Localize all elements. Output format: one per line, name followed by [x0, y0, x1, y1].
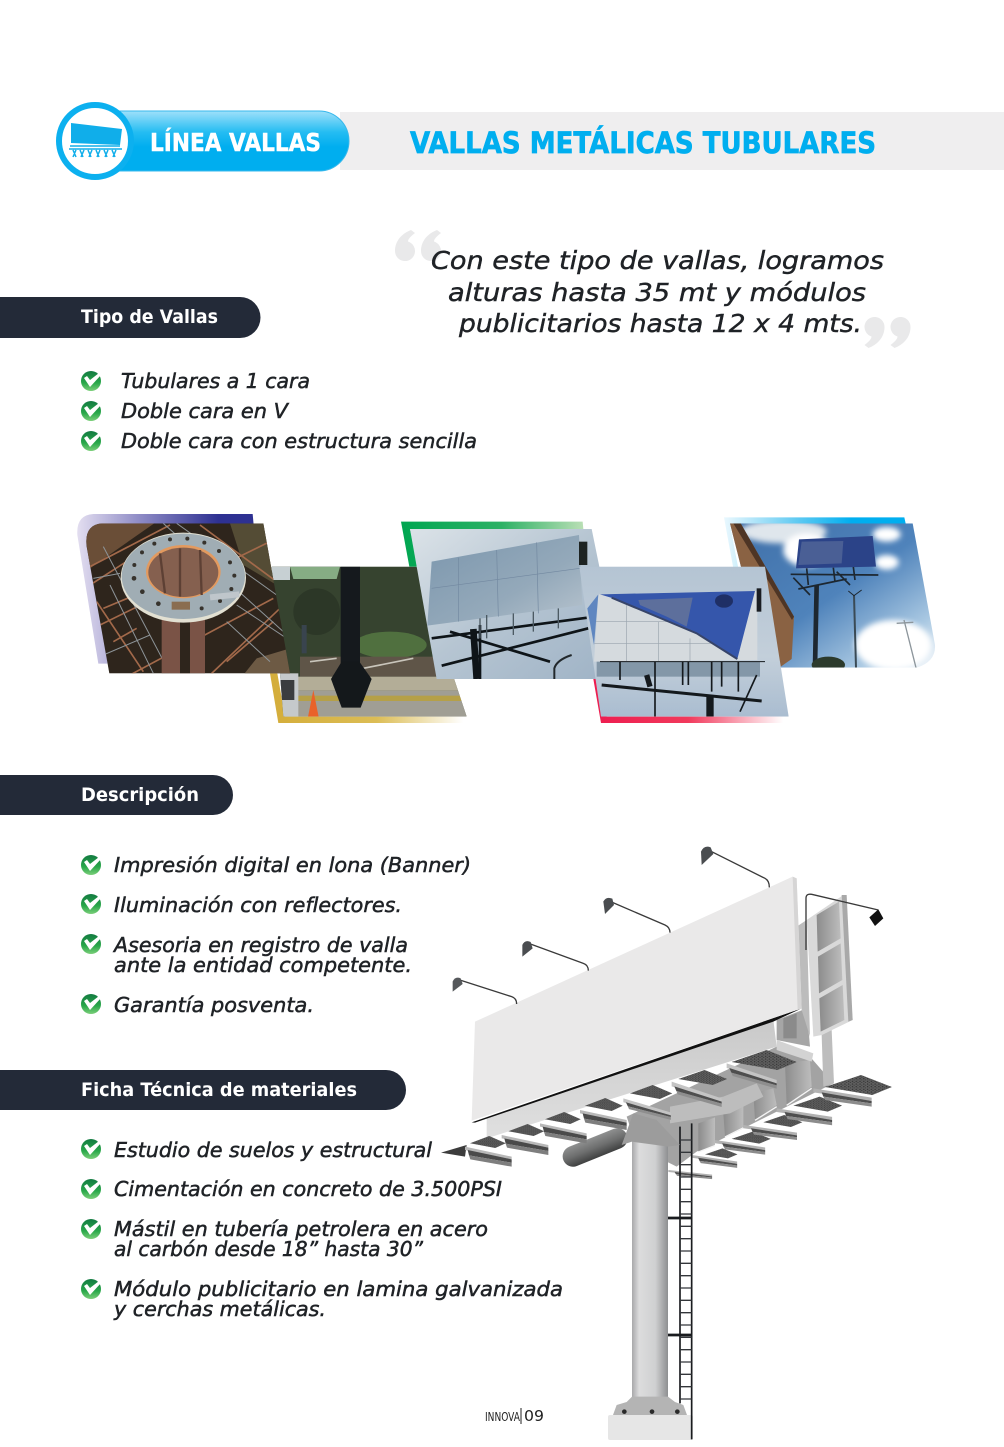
footer: logo and page number: INNOVA [485, 1410, 521, 1424]
beams and gratings, right row [668, 1075, 892, 1179]
list: tipos: Doble cara con estructura sencilla [121, 429, 477, 453]
ladder [668, 1123, 692, 1439]
list: descripción: Iluminación con reflectores. [114, 893, 402, 917]
quote text [431, 246, 884, 338]
heading: descripción: Descripción [81, 784, 199, 806]
list: descripción: Impresión digital en lona (Banner) [114, 853, 471, 877]
under box [487, 1020, 777, 1138]
side frame [797, 895, 853, 1087]
photo: billboard against sky [727, 520, 940, 673]
list: ficha técnica: Cimentación en concreto de 3.500PSI [114, 1177, 502, 1201]
list: tipos: Doble cara en V [121, 399, 289, 423]
band: green [401, 522, 583, 567]
photo: banner installation [577, 565, 790, 718]
list: ficha técnica: Estudio de suelos y estructural [114, 1138, 432, 1162]
list: descripción: ante la entidad competente. [114, 953, 412, 977]
billboard illustration [441, 847, 892, 1440]
rear structure [627, 1008, 833, 1167]
diagonal pipe [560, 1125, 631, 1170]
photo: silver billboard [407, 525, 607, 682]
photo: base plate [80, 522, 293, 675]
mast [608, 1140, 693, 1440]
band: blue [724, 517, 906, 568]
badge: línea vallas [59, 105, 349, 177]
photo: steel mast [270, 565, 470, 718]
list: ficha técnica: y cerchas metálicas. [113, 1297, 326, 1321]
list: ficha técnica: Módulo publicitario en lamina galvanizada [114, 1277, 563, 1301]
heading: tipo de vallas [0, 297, 260, 338]
header grey bar [340, 112, 1004, 170]
quote marks [395, 230, 911, 348]
header title: VALLAS METÁLICAS TUBULARES [410, 126, 876, 160]
list: tipos: Tubulares a 1 cara [121, 369, 310, 393]
photo strip [77, 514, 940, 723]
mast cap [622, 1113, 680, 1147]
quote text: alturas hasta 35 mt y módulos [448, 278, 866, 307]
list: tipos [81, 369, 477, 453]
heading: descripción [0, 775, 233, 815]
list: ficha técnica: Mástil en tubería petrolera en acero [114, 1217, 488, 1241]
list: descripción [81, 853, 471, 1017]
quote text: publicitarios hasta 12 x 4 mts. [458, 309, 862, 338]
quote text: Con este tipo de vallas, logramos [431, 246, 884, 275]
footer: logo and page number [485, 1407, 544, 1425]
lamps [457, 848, 878, 1004]
lamp heads [453, 847, 883, 992]
billboard face [472, 877, 802, 1123]
band: gold [270, 673, 463, 723]
beams and gratings, left and centre row [441, 1050, 797, 1167]
list: ficha técnica [81, 1138, 563, 1321]
heading: ficha técnica [0, 1070, 406, 1110]
footer: logo and page number: 09 [524, 1407, 544, 1425]
badge: línea vallas: LÍNEA VALLAS [150, 128, 321, 157]
list: ficha técnica: al carbón desde 18” hasta 30” [114, 1237, 424, 1261]
list: descripción: Asesoria en registro de valla [112, 933, 408, 957]
heading: ficha técnica: Ficha Técnica de materiales [81, 1079, 357, 1101]
heading: tipo de vallas: Tipo de Vallas [81, 306, 218, 328]
list: descripción: Garantía posventa. [114, 993, 314, 1017]
band: red [593, 679, 783, 723]
band: purple [77, 514, 254, 664]
